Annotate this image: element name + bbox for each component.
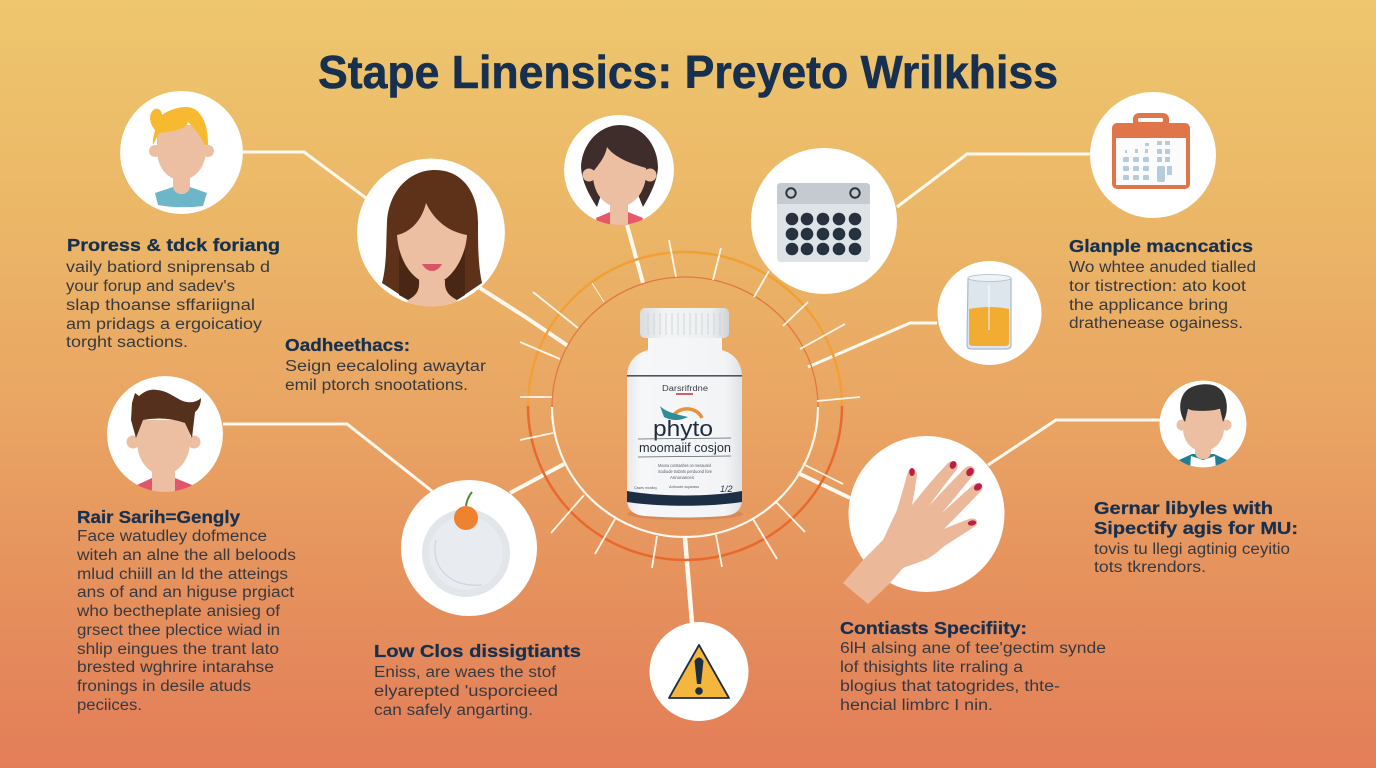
text block: progress: Proress & tdck foriang bbox=[67, 235, 280, 255]
text block: oadheethacs: emil ptorch snootations. bbox=[285, 377, 468, 394]
central ring with ticks bbox=[520, 240, 860, 568]
text block: progress: am pridags a ergoicatioy bbox=[66, 316, 262, 333]
connector lines bbox=[223, 152, 1160, 623]
text block: low clos: Eniss, are waes the stof bbox=[374, 664, 557, 681]
supplement bottle: Annonances bbox=[670, 475, 695, 480]
icon: brown-haired boy portrait bbox=[107, 376, 223, 496]
text block: rair sarih: Rair Sarih=Gengly bbox=[77, 507, 240, 527]
text block: gernar: Gernar libyles with bbox=[1094, 498, 1273, 518]
text block: glanple: Glanple macncatics bbox=[1069, 236, 1253, 256]
text block: low clos: can safely angarting. bbox=[374, 702, 533, 719]
icon: dark-haired boy portrait bbox=[1160, 380, 1246, 470]
text block: low clos bbox=[374, 641, 581, 719]
text block: rair sarih: peciices. bbox=[77, 697, 142, 714]
text block: progress bbox=[66, 235, 280, 351]
text block: rair sarih: who bectheplate anisieg of bbox=[76, 603, 281, 620]
text block: contiasts: lof thisights lite rraling a bbox=[840, 659, 1023, 676]
text block: progress: slap thoanse sffariignal bbox=[66, 297, 255, 314]
supplement bottle: 1/2 bbox=[720, 484, 733, 494]
icon: orange calendar bbox=[1090, 92, 1216, 218]
text block: oadheethacs: Oadheethacs: bbox=[285, 335, 410, 355]
icon: glass of juice bbox=[938, 261, 1042, 365]
text block: gernar bbox=[1094, 498, 1298, 576]
text block: gernar: Sipectify agis for MU: bbox=[1094, 518, 1298, 538]
text block: rair sarih: brested wghrire intarahse bbox=[77, 659, 274, 676]
text block: low clos: Low Clos dissigtiants bbox=[374, 641, 581, 661]
text block: contiasts bbox=[840, 618, 1106, 714]
text block: rair sarih: witeh an alne the all beloods bbox=[76, 547, 296, 564]
text block: contiasts: blogius that tatogrides, thte- bbox=[840, 678, 1060, 695]
text block: rair sarih: mlud chiill an ld the atteings bbox=[77, 566, 288, 583]
supplement bottle: Cases moniloy bbox=[634, 485, 657, 490]
icon: hand with red nails bbox=[843, 436, 1004, 604]
text block: oadheethacs bbox=[285, 335, 486, 394]
text block: progress: vaily batiord sniprensab d bbox=[66, 259, 270, 276]
text block: gernar: tots tkrendors. bbox=[1094, 559, 1206, 576]
title: Stape Linensics: Preyeto Wrilkhiss bbox=[318, 46, 1058, 98]
supplement bottle: Sodiude trabnts perduond fore bbox=[658, 469, 712, 474]
text block: progress: your forup and sadev's bbox=[66, 278, 235, 295]
icon: long-haired woman portrait bbox=[357, 158, 505, 308]
text block: glanple: drathenease ogainess. bbox=[1069, 315, 1243, 332]
supplement bottle: Moxna costnashes on mesaured bbox=[658, 463, 711, 468]
icon: blond boy portrait bbox=[120, 91, 243, 214]
text block: glanple bbox=[1069, 236, 1256, 332]
text block: low clos: elyarepted 'usporcieed bbox=[374, 683, 558, 700]
supplement bottle: moomaiif cosjon bbox=[639, 440, 731, 455]
icon: warning triangle bbox=[650, 622, 748, 721]
text block: gernar: tovis tu llegi agtinig ceyitio bbox=[1094, 541, 1290, 558]
text block: rair sarih: ans of and an higuse prgiact bbox=[77, 584, 295, 601]
supplement bottle bbox=[627, 308, 743, 520]
supplement bottle: Darsrifrdne bbox=[662, 384, 709, 393]
icon: plate with orange bbox=[401, 480, 537, 616]
text block: rair sarih: shlip eingues the trant lato bbox=[77, 641, 279, 658]
supplement bottle: phyto bbox=[653, 416, 713, 441]
text block: glanple: Wo whtee anuded tialled bbox=[1069, 259, 1256, 276]
text block: glanple: tor tistrection: ato koot bbox=[1069, 278, 1247, 295]
text block: rair sarih: fronings in desile atuds bbox=[77, 678, 251, 695]
text block: rair sarih bbox=[76, 507, 296, 714]
supplement bottle: Adhoute aqueass bbox=[669, 484, 699, 489]
text block: oadheethacs: Seign eecaloling awaytar bbox=[285, 358, 486, 375]
text block: rair sarih: grsect thee plectice wiad in bbox=[77, 622, 280, 639]
text block: contiasts: 6lH alsing ane of tee'gectim synde bbox=[840, 640, 1106, 657]
text block: contiasts: Contiasts Specifiity: bbox=[840, 618, 1027, 638]
icon: short-haired girl portrait bbox=[564, 115, 674, 227]
icon: grey calendar with dots bbox=[751, 148, 897, 294]
text block: contiasts: hencial limbrc I nin. bbox=[840, 697, 993, 714]
text block: progress: torght sactions. bbox=[66, 334, 188, 351]
text block: glanple: the applicance bring bbox=[1069, 297, 1228, 314]
text block: rair sarih: Face watudley dofmence bbox=[77, 528, 267, 545]
